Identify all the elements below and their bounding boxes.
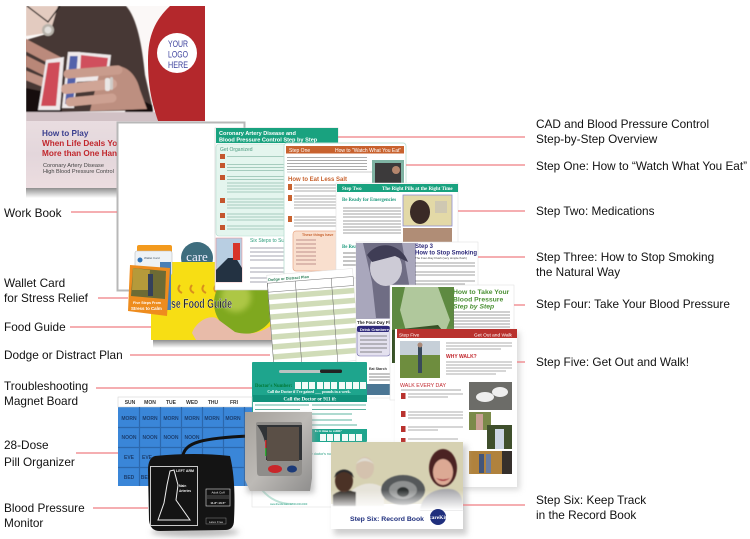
- label: step five: Step Five: Get Out and Walk!: [536, 355, 689, 369]
- record book title: Step Six: Record Book: [350, 516, 424, 523]
- panel: pill organizer: BED: [141, 475, 152, 481]
- panel: pill organizer: [118, 397, 252, 486]
- panel: white page behind worksheets: [118, 122, 244, 290]
- icon: blood pressure cuff: [148, 436, 250, 537]
- label: step three: the Natural Way: [536, 265, 620, 279]
- panel: pill organizer: EVE: [124, 455, 135, 461]
- panel: pill organizer: THU: [208, 400, 219, 406]
- panel: step one page: Step One: [289, 148, 310, 154]
- panel: pill organizer: NOON: [142, 435, 158, 441]
- logo: care kit: careKit: [429, 515, 447, 521]
- panel: food guide: [151, 242, 276, 348]
- panel: step one page: How to Eat Less Salt: [288, 177, 347, 183]
- label: food guide: Food Guide: [4, 320, 66, 334]
- panel: wallet card: Stress to Calm: [131, 306, 162, 311]
- panel: pill organizer: MORN: [142, 416, 158, 422]
- panel: pill organizer: BED: [124, 475, 135, 481]
- icon: blood pressure cuff: Arteries: [179, 489, 191, 493]
- panel: step three page: [356, 242, 478, 398]
- panel: step three page: How to Stop Smoking: [415, 250, 477, 256]
- panel: step two page: [336, 183, 458, 278]
- panel: step five page: Get Out and Walk: [474, 332, 513, 338]
- cover title: When Life Deals You: [42, 139, 122, 148]
- label: blood pressure monitor: Monitor: [4, 516, 43, 530]
- panel: take your blood pressure page: [390, 285, 514, 400]
- label: overview: CAD and Blood Pressure Control: [536, 117, 709, 131]
- panel: work book cover: [20, 6, 205, 198]
- panel: pill organizer: NOON: [184, 435, 200, 441]
- icon: blood pressure monitor: [245, 412, 314, 493]
- panel: CAD overview page: Get Organized: [220, 147, 253, 153]
- volcano photo: [216, 238, 242, 282]
- label: overview: Step-by-Step Overview: [536, 132, 658, 146]
- label: dodge or distract plan: Dodge or Distract Plan: [4, 348, 123, 362]
- panel: troubleshooting magnet board: Doctor's Number:: [255, 384, 293, 389]
- panel: step two page: The Right Pills at the Right Time: [382, 187, 453, 192]
- panel: wallet card: Wallet Card: [144, 256, 160, 260]
- step five photos: [469, 382, 512, 474]
- label: work book: Work Book: [4, 206, 62, 220]
- panel: pill organizer: SUN: [125, 400, 136, 406]
- panel: pill organizer: NOON: [164, 435, 179, 441]
- panel: step one page: [284, 143, 406, 277]
- panel: step three page: The Four-Day Flush (very simple flush): [415, 256, 467, 260]
- panel: take your blood pressure page: Blood Pressure: [453, 296, 503, 304]
- panel: pill organizer: MON: [144, 400, 156, 406]
- cover title: More than One Hand: [42, 149, 122, 158]
- logo circle: YOUR: [168, 39, 188, 50]
- panel: troubleshooting magnet board: Call the Doctor if I've gained ___ pounds in a week.: [267, 390, 351, 394]
- panel: CAD overview page: Blood Pressure Control Step by Step: [219, 138, 318, 144]
- step two photos: [403, 195, 452, 242]
- panel: step three page: Step 3: [415, 244, 434, 250]
- label: step three: Step Three: How to Stop Smoking: [536, 250, 714, 264]
- cover title: [42, 129, 122, 175]
- panel: food guide: care: [186, 249, 208, 264]
- panel: pill organizer: TUE: [166, 400, 177, 406]
- cover title: How to Play: [42, 129, 89, 138]
- logo circle: HERE: [168, 60, 188, 71]
- label: magnet board: Magnet Board: [4, 394, 78, 408]
- panel: pill organizer: FRI: [230, 400, 239, 406]
- panel: step two page: Be Ready for Emergencies: [342, 198, 396, 203]
- panel: wallet card: [128, 245, 172, 316]
- panel: step six record book: [331, 442, 467, 535]
- panel: CAD overview page: Six Steps to Success: [250, 238, 297, 244]
- panel: step one page: These things have: [302, 233, 333, 237]
- panel: pill organizer: NOON: [122, 435, 137, 441]
- panel: dodge or distract plan: [267, 269, 360, 367]
- panel: pill organizer: MORN: [163, 416, 179, 422]
- label: step six: Step Six: Keep Track: [536, 493, 646, 507]
- panel: step two page: Step Two: [342, 187, 362, 192]
- leader lines: [70, 137, 525, 508]
- panel: step five page: WHY WALK?: [446, 354, 477, 360]
- panel: take your blood pressure page: Step by Step: [453, 304, 494, 310]
- panel: step five page: Step Five: [399, 332, 420, 338]
- icon: blood pressure cuff: Main: [179, 484, 186, 488]
- label: step one: Step One: How to “Watch What You Eat”: [536, 159, 747, 173]
- label: step six: in the Record Book: [536, 508, 636, 522]
- icon: blood pressure cuff: Adult Cuff: [211, 490, 225, 494]
- panel: step two page: Be Ready: [342, 245, 362, 250]
- walking photo: [400, 341, 440, 378]
- icon: blood pressure cuff: Latex Free: [209, 520, 224, 524]
- icon: blood pressure cuff: LEFT ARM: [176, 469, 194, 473]
- panel: pill organizer: MORN: [184, 416, 200, 422]
- panel: CAD overview page: Coronary Artery Disease and: [219, 131, 296, 137]
- logo circle: [157, 33, 197, 73]
- cover title: High Blood Pressure Control: [43, 169, 114, 175]
- cover title: Coronary Artery Disease: [43, 163, 104, 169]
- panel: pill organizer: WED: [186, 400, 198, 406]
- panel: CAD overview page: [215, 128, 338, 290]
- panel: troubleshooting magnet board: Call the Doctor or 911 if:: [283, 398, 337, 402]
- red panel: [148, 6, 205, 121]
- lettered steps: [220, 154, 285, 230]
- label: step two: Step Two: Medications: [536, 204, 655, 218]
- panel: troubleshooting magnet board: www.thesite.com 1-800-000-0000: [270, 503, 308, 506]
- panel: troubleshooting magnet board: Is it time to refill?: [315, 429, 342, 433]
- label: step four: Step Four: Take Your Blood Pressure: [536, 297, 730, 311]
- label: wallet card: Wallet Card: [4, 276, 65, 290]
- panel: pill organizer: MORN: [121, 416, 137, 422]
- panel: take your blood pressure page: How to Take Your: [453, 289, 510, 296]
- panel: pill organizer: EVE: [142, 455, 153, 461]
- label: pill organizer: Pill Organizer: [4, 455, 75, 469]
- panel: pill organizer: MORN: [225, 416, 241, 422]
- label: pill organizer: 28-Dose: [4, 438, 49, 452]
- panel: troubleshooting magnet board: If the doctor's number changes: [305, 452, 353, 456]
- label: blood pressure monitor: Blood Pressure: [4, 501, 85, 515]
- panel: step five page: WALK EVERY DAY: [400, 383, 446, 389]
- panel: step five page: [395, 329, 520, 490]
- panel: step one page: How to "Watch What You Eat": [335, 148, 401, 154]
- panel: pill organizer: MORN: [204, 416, 220, 422]
- icon: blood pressure cuff: 11.8"-16.5": [210, 501, 226, 505]
- panel: food guide: se Food Guide: [171, 297, 232, 311]
- panel: dodge or distract plan: Dodge or Distract Plan: [268, 275, 310, 282]
- panel: step three page: The Four-Day Flush: [357, 320, 398, 325]
- label: wallet card: for Stress Relief: [4, 291, 89, 305]
- couple and driver illustration: [333, 449, 463, 510]
- panel: wallet card: Five Steps From: [133, 301, 161, 305]
- panel: step three page: Eat Starch: [369, 367, 387, 371]
- panel: step three page: Drink Cranberry: [360, 327, 391, 332]
- panel: troubleshooting magnet board: [252, 362, 367, 507]
- label: magnet board: Troubleshooting: [4, 379, 88, 393]
- logo circle: LOGO: [168, 50, 188, 60]
